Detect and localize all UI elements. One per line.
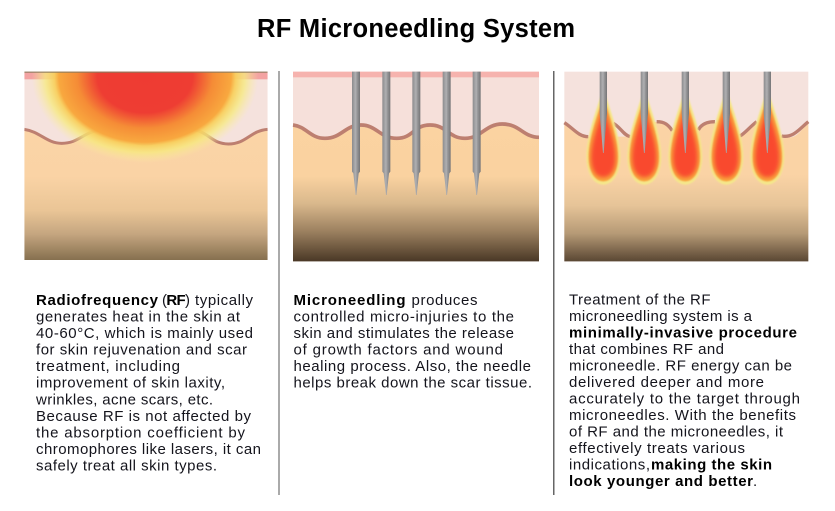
text block: radiofrequency xyxy=(35,292,261,474)
text block: treatment: accurately to the target through xyxy=(569,390,800,408)
text block: radiofrequency: safely treat all skin types. xyxy=(36,458,217,474)
text block: treatment: effectively treats various xyxy=(569,440,745,457)
text block: radiofrequency: Radiofrequency xyxy=(36,292,159,309)
text block: microneedling: helps break down the scar tissue. xyxy=(294,375,532,392)
divider: left xyxy=(278,71,280,495)
text block: treatment: microneedles. With the benefits xyxy=(569,407,796,424)
text block: treatment: that combines RF and xyxy=(569,341,724,358)
text block: microneedling: controlled micro-injuries to the xyxy=(294,308,514,326)
text block: radiofrequency: chromophores like lasers, it can xyxy=(36,441,261,458)
text block: microneedling: produces xyxy=(412,292,478,309)
text block: treatment: Treatment of the RF xyxy=(569,292,710,308)
text block: treatment: microneedling system is a xyxy=(569,308,753,325)
text block: radiofrequency: treatment, including xyxy=(36,358,180,375)
text block: radiofrequency: the absorption coefficient by xyxy=(36,424,246,441)
text block: treatment: microneedle. RF energy can be xyxy=(569,358,792,374)
needles xyxy=(352,72,481,195)
text block: radiofrequency: for skin rejuvenation and scar xyxy=(36,342,247,359)
text block: microneedling: Microneedling xyxy=(294,292,406,309)
text block: radiofrequency: generates heat in the skin at xyxy=(36,308,241,326)
text block: microneedling: healing process. Also, the needle xyxy=(294,358,531,375)
text block: treatment: indications, xyxy=(569,456,650,474)
text block: treatment: making the skin xyxy=(651,456,772,474)
text block: treatment: delivered deeper and more xyxy=(569,374,764,391)
text block: microneedling xyxy=(294,292,532,392)
needles with heat xyxy=(600,72,771,153)
text block: treatment: look younger and better xyxy=(569,473,753,490)
text block: treatment xyxy=(569,292,800,490)
heat zone xyxy=(34,72,256,158)
heat plumes xyxy=(586,87,784,185)
text block: microneedling: skin and stimulates the release xyxy=(294,325,514,342)
title: RF Microneedling System xyxy=(257,15,575,43)
divider: right xyxy=(553,71,554,495)
panel: radiofrequency skin illustration xyxy=(24,72,268,260)
panel: microneedling skin illustration xyxy=(293,72,539,261)
text block: radiofrequency: typically xyxy=(195,292,254,309)
text block: radiofrequency: Because RF is not affected by xyxy=(36,408,252,425)
text block: treatment: of RF and the microneedles, it xyxy=(569,424,784,440)
text block: treatment: . xyxy=(753,473,757,490)
text block: treatment: minimally-invasive procedure xyxy=(569,324,797,342)
text block: radiofrequency: 40-60°C, which is mainly used xyxy=(36,325,253,342)
panel: combined RF microneedling illustration xyxy=(564,72,808,261)
text block: radiofrequency: (RF) xyxy=(162,292,190,309)
text block: radiofrequency: wrinkles, acne scars, etc. xyxy=(35,391,213,408)
text block: radiofrequency: improvement of skin laxity, xyxy=(36,375,225,392)
text block: microneedling: of growth factors and wound xyxy=(294,342,503,359)
